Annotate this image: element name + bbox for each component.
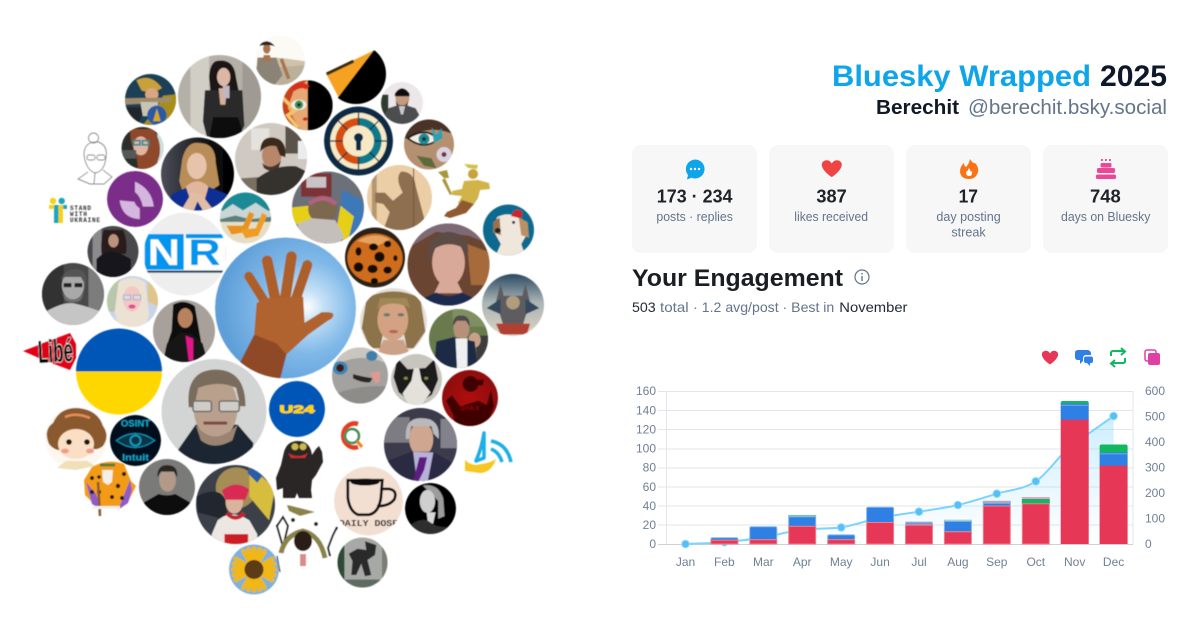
- avatar: TV commentator: [384, 408, 459, 485]
- avatar: Kaja portrait: [161, 138, 234, 214]
- left axis labels: 60: [643, 480, 656, 494]
- avatar: red-haired woman with glasses: [122, 127, 164, 169]
- month labels: Apr: [793, 555, 812, 569]
- month labels: Mar: [753, 555, 774, 569]
- stat card: days on Bluesky: [1043, 145, 1168, 253]
- avatar: curly-haired woman: [360, 288, 427, 355]
- avatar: woman with pink blouse: [153, 300, 215, 365]
- avatar: beach chairs: [220, 192, 271, 244]
- engagement summary: November: [839, 299, 908, 315]
- engagement summary: 503: [632, 299, 656, 315]
- logo: Stand With Ukraine: [49, 198, 100, 224]
- stat card: likes: [769, 145, 894, 253]
- right axis labels: 300: [1145, 460, 1165, 474]
- avatar: orange and black flag: [325, 50, 387, 105]
- avatar cluster: [23, 35, 544, 594]
- stacked bars: [711, 401, 1128, 544]
- month labels: [676, 555, 1124, 569]
- avatar: archer illustration: [125, 74, 176, 125]
- avatar: armoured soldier illustration: [482, 274, 544, 336]
- logo: Stand With Ukraine: UKRAINE: [70, 217, 100, 224]
- icon: info: [855, 270, 869, 284]
- user name and handle: @berechit.bsky.social: [968, 97, 1167, 119]
- month labels: Feb: [714, 555, 735, 569]
- bar: Jul: [906, 522, 932, 544]
- avatar: Daily Dose coffee cup: [334, 466, 403, 536]
- cumulative area: [686, 416, 1114, 544]
- bar: Feb: [711, 538, 738, 544]
- avatar: moustached ghost: [275, 504, 337, 572]
- month labels: Jan: [676, 555, 695, 569]
- icon: chat bubble: [686, 159, 705, 180]
- bar: Nov: [1061, 401, 1089, 544]
- avatar: stone cat mosaic: [338, 538, 390, 590]
- stat card: posts and replies: posts · replies: [656, 210, 733, 224]
- bar: Apr: [788, 515, 816, 544]
- month labels: Dec: [1103, 555, 1124, 569]
- stat card: posting streak: 17: [959, 186, 978, 206]
- logo: Stand With Ukraine: STAND: [70, 205, 91, 212]
- month labels: Aug: [947, 555, 969, 569]
- legend icon: quotes: [1145, 350, 1160, 365]
- right axis labels: [1145, 384, 1165, 551]
- stat card: likes: 387: [816, 186, 847, 206]
- avatar: dog in Santa hat: [483, 204, 534, 256]
- avatar: politician outdoors: [429, 309, 488, 371]
- line points: [682, 412, 1117, 548]
- avatar: woman selfie: [178, 55, 263, 138]
- avatar: sunflower: [229, 544, 279, 594]
- month labels: Jul: [911, 555, 927, 569]
- icon: heart: [822, 160, 842, 177]
- avatar: man in beanie: [381, 82, 423, 126]
- avatar: purple logo: [107, 171, 163, 227]
- month labels: Jun: [870, 555, 890, 569]
- right axis labels: 200: [1145, 486, 1165, 500]
- chart legend: [1042, 348, 1160, 367]
- engagement summary: total: [660, 299, 689, 315]
- stat card: posting streak: day posting: [936, 210, 1001, 224]
- bar: May: [828, 535, 855, 544]
- right axis labels: 500: [1145, 410, 1165, 424]
- left axis labels: 20: [643, 518, 656, 532]
- avatar: cat with blue eyes: [332, 348, 388, 404]
- logo: blue sail with yellow boat: [465, 433, 511, 473]
- bar: Oct: [1022, 497, 1050, 544]
- bar: Dec: [1100, 444, 1128, 544]
- avatar: man with glasses portrait: [162, 359, 266, 469]
- left axis labels: 80: [643, 460, 656, 474]
- avatar: decorated eye: [404, 120, 454, 170]
- icon: birthday cake: [1096, 159, 1116, 179]
- avatar: cowboy: [255, 35, 305, 85]
- avatar: NR logo: [144, 212, 226, 296]
- month labels: Oct: [1026, 555, 1046, 569]
- stat card: days on Bluesky: 748: [1090, 186, 1121, 206]
- left axis labels: 140: [636, 403, 656, 417]
- right axis labels: 400: [1145, 435, 1165, 449]
- avatar: raised hand against the sky: [215, 238, 356, 386]
- left axis labels: [636, 384, 656, 551]
- header title: Bluesky Wrapped: [832, 60, 1091, 93]
- month labels: Sep: [986, 555, 1008, 569]
- right axis labels: 0: [1145, 537, 1152, 551]
- combined bar and line chart: [636, 384, 1165, 569]
- gridlines: [658, 391, 1133, 544]
- right axis labels: 600: [1145, 384, 1165, 398]
- header title: 2025: [1100, 60, 1167, 93]
- stat card: posts and replies: [632, 145, 757, 253]
- avatar: black and white cat: [391, 354, 442, 405]
- avatar: half-black eye painting: [283, 80, 333, 130]
- avatar: shadow of a woman: [367, 165, 432, 230]
- avatar: red silhouette: [442, 370, 498, 426]
- avatar: doll: [45, 407, 107, 470]
- left axis labels: 40: [643, 499, 656, 513]
- stat card: posting streak: [906, 145, 1031, 253]
- legend icon: replies: [1075, 350, 1093, 366]
- avatar: Ukrainian rally crowd: [292, 172, 364, 244]
- logo: Stand With Ukraine: WITH: [70, 211, 87, 218]
- icon: flame: [960, 159, 978, 179]
- user name and handle: [876, 97, 1167, 119]
- logo: green and red ring: [343, 424, 362, 448]
- left axis labels: 0: [649, 537, 656, 551]
- left axis labels: 100: [636, 442, 656, 456]
- avatar: blonde woman: [107, 276, 158, 327]
- avatar: woman in vyshyvanka: [196, 465, 275, 546]
- avatar: old man in orange shirt: [84, 462, 136, 516]
- avatar: keyhole logo: [324, 106, 393, 176]
- logo: Libé: [23, 332, 76, 370]
- logo: Libé: Libé: [37, 332, 74, 370]
- avatar: ladybug: [345, 228, 405, 288]
- bar: Sep: [983, 501, 1011, 544]
- stat card: posting streak: streak: [951, 226, 986, 240]
- bar: Mar: [750, 527, 777, 544]
- stat card: likes: likes received: [794, 210, 868, 224]
- icon: line-drawn woman sketch: [78, 133, 112, 184]
- avatar: woman in black and white: [405, 483, 456, 537]
- heading: Your Engagement: Your Engagement: [632, 265, 843, 292]
- legend icon: likes: [1042, 351, 1058, 364]
- avatar: woman in black sweater: [88, 226, 138, 280]
- month labels: Nov: [1064, 555, 1085, 569]
- avatar: young man in suit: [408, 224, 490, 310]
- left axis labels: 120: [636, 422, 656, 436]
- avatar: man in black t-shirt: [139, 459, 195, 518]
- right axis labels: 100: [1145, 512, 1165, 526]
- stat card: days on Bluesky: days on Bluesky: [1061, 210, 1151, 224]
- cumulative line: [686, 416, 1114, 544]
- avatar: Ukrainian flag: [76, 328, 162, 414]
- engagement summary: · 1.2 avg/post · Best in: [693, 299, 834, 315]
- bar: Jun: [867, 507, 894, 544]
- legend icon: reposts: [1111, 348, 1125, 367]
- avatar: OSINT Intuit: [110, 415, 161, 466]
- icon: golden Hermes figure: [438, 164, 490, 218]
- month labels: May: [830, 555, 853, 569]
- engagement summary: [632, 299, 908, 315]
- stat card: posts and replies: 173 · 234: [657, 186, 732, 206]
- bar: Aug: [944, 520, 972, 544]
- user name and handle: Berechit: [876, 97, 959, 119]
- avatar: black monster: [276, 441, 323, 498]
- left axis labels: 160: [636, 384, 656, 398]
- avatar: man by the window: [235, 123, 311, 199]
- avatar: bearded man in black and white: [42, 263, 104, 328]
- avatar: U24 badge: [269, 381, 325, 437]
